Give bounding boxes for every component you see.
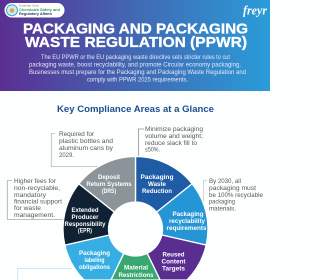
section heading: Key Compliance Areas at a Glance [57,104,214,115]
callout: extended producer responsibility [7,179,63,220]
logo: Chemicals Safety and Regulatory Affairs: Chemicals Safety and [19,8,61,12]
callout: recyclability: By 2030, all [209,179,241,185]
segment: Extended Producer Responsibility: Producer [72,214,99,221]
callout: deposit return systems: 2029. [59,153,74,159]
segment: Reused Content Targets [147,235,206,280]
callout: recyclability: materials. [209,206,236,212]
intro paragraph: comply with PPWR 2025 requirements. [87,76,188,83]
segment: Material Restrictions [111,253,160,280]
segment: Extended Producer Responsibility: Extended [72,207,99,214]
segment: Deposit Return Systems [79,156,136,212]
segment: Packaging recyclability requirements [157,184,208,245]
callout: extended producer responsibility: for waste [14,206,42,212]
callout: labeling box [18,268,72,280]
intro paragraph: Businesses must prepare for the Packaging and Packaging Waste Regulation and [29,69,246,76]
callout: recyclability: be 100% recyclable [209,193,264,199]
segment: Extended Producer Responsibility: (EPR) [78,228,92,234]
title: PACKAGING AND PACKAGING [23,22,248,38]
segment: Packaging Waste Reduction: Packaging [140,174,174,181]
callout: packaging waste reduction: ≤50%. [145,148,160,154]
callout: recyclability: packaging [209,200,235,206]
segment: Packaging recyclability requirements: recyclability [169,218,206,225]
intro paragraph: packaging waste, boost recyclability, and promote Circular economy packaging. [29,61,241,68]
title: WASTE REGULATION (PPWR) [25,35,247,51]
logo: Chemicals Safety and Regulatory Affairs [4,3,64,18]
segment: Material Restrictions: Restrictions [118,272,154,279]
segment: Reused Content Targets: Targets [162,266,186,272]
callout: extended producer responsibility: Higher fees for [14,179,56,185]
segment: Packaging labeling obligations: obligations [79,264,111,271]
logo: Chemicals Safety and Regulatory Affairs: Regulatory Affairs [19,12,52,16]
wheel diagram [63,156,208,280]
callout: deposit return systems: Required for [59,132,94,138]
segment: Deposit Return Systems: (DRS) [102,188,116,195]
callout: deposit return systems [51,132,135,166]
segment: Material Restrictions: Material [124,264,148,272]
logo: Freyr: freyr [243,2,268,18]
title [23,22,248,51]
callout: extended producer responsibility: financial support [14,200,62,206]
segment: Extended Producer Responsibility: Responsibility [64,221,106,228]
callout: packaging waste reduction: Minimize packaging [145,127,203,133]
header banner [0,0,270,91]
callout: deposit return systems: aluminum cans by [59,146,113,152]
segment: Packaging recyclability requirements: requirements [166,225,207,232]
callout: extended producer responsibility: management. [14,213,55,219]
callout: deposit return systems: plastic bottles and [59,139,113,145]
callout: packaging waste reduction: volume and weight; [145,134,203,140]
intro paragraph: The EU PPWR or the EU packaging waste directive sets stricter rules to cut [41,54,230,61]
callout: recyclability [204,179,264,218]
segment: Deposit Return Systems: Deposit [98,174,120,181]
callout: packaging waste reduction: reduce slack fill to [145,141,198,147]
callout: extended producer responsibility: mandatory [14,193,46,199]
logo: Chemicals Safety and Regulatory Affairs: Knowledge Center [19,4,39,8]
segment: Reused Content Targets: Content [162,258,186,266]
segment: Packaging Waste Reduction [136,156,192,212]
callout: packaging waste reduction [138,127,203,157]
intro paragraph [29,54,246,83]
segment: Reused Content Targets: Reused [162,252,185,258]
segment: Packaging labeling obligations: Packaging [79,250,110,257]
callout: extended producer responsibility: non-recyclable, [14,186,60,192]
segment: Packaging labeling obligations: labeling [84,257,105,264]
segment: Packaging recyclability requirements: Packaging [172,211,204,218]
segment: Packaging Waste Reduction: Waste [148,181,167,188]
segment: Extended Producer Responsibility [63,184,114,245]
segment: Deposit Return Systems: Return Systems [86,181,132,188]
segment: Packaging labeling obligations [65,235,124,280]
callout: recyclability: packaging must [209,186,256,192]
segment: Packaging Waste Reduction: Reduction [142,188,172,195]
